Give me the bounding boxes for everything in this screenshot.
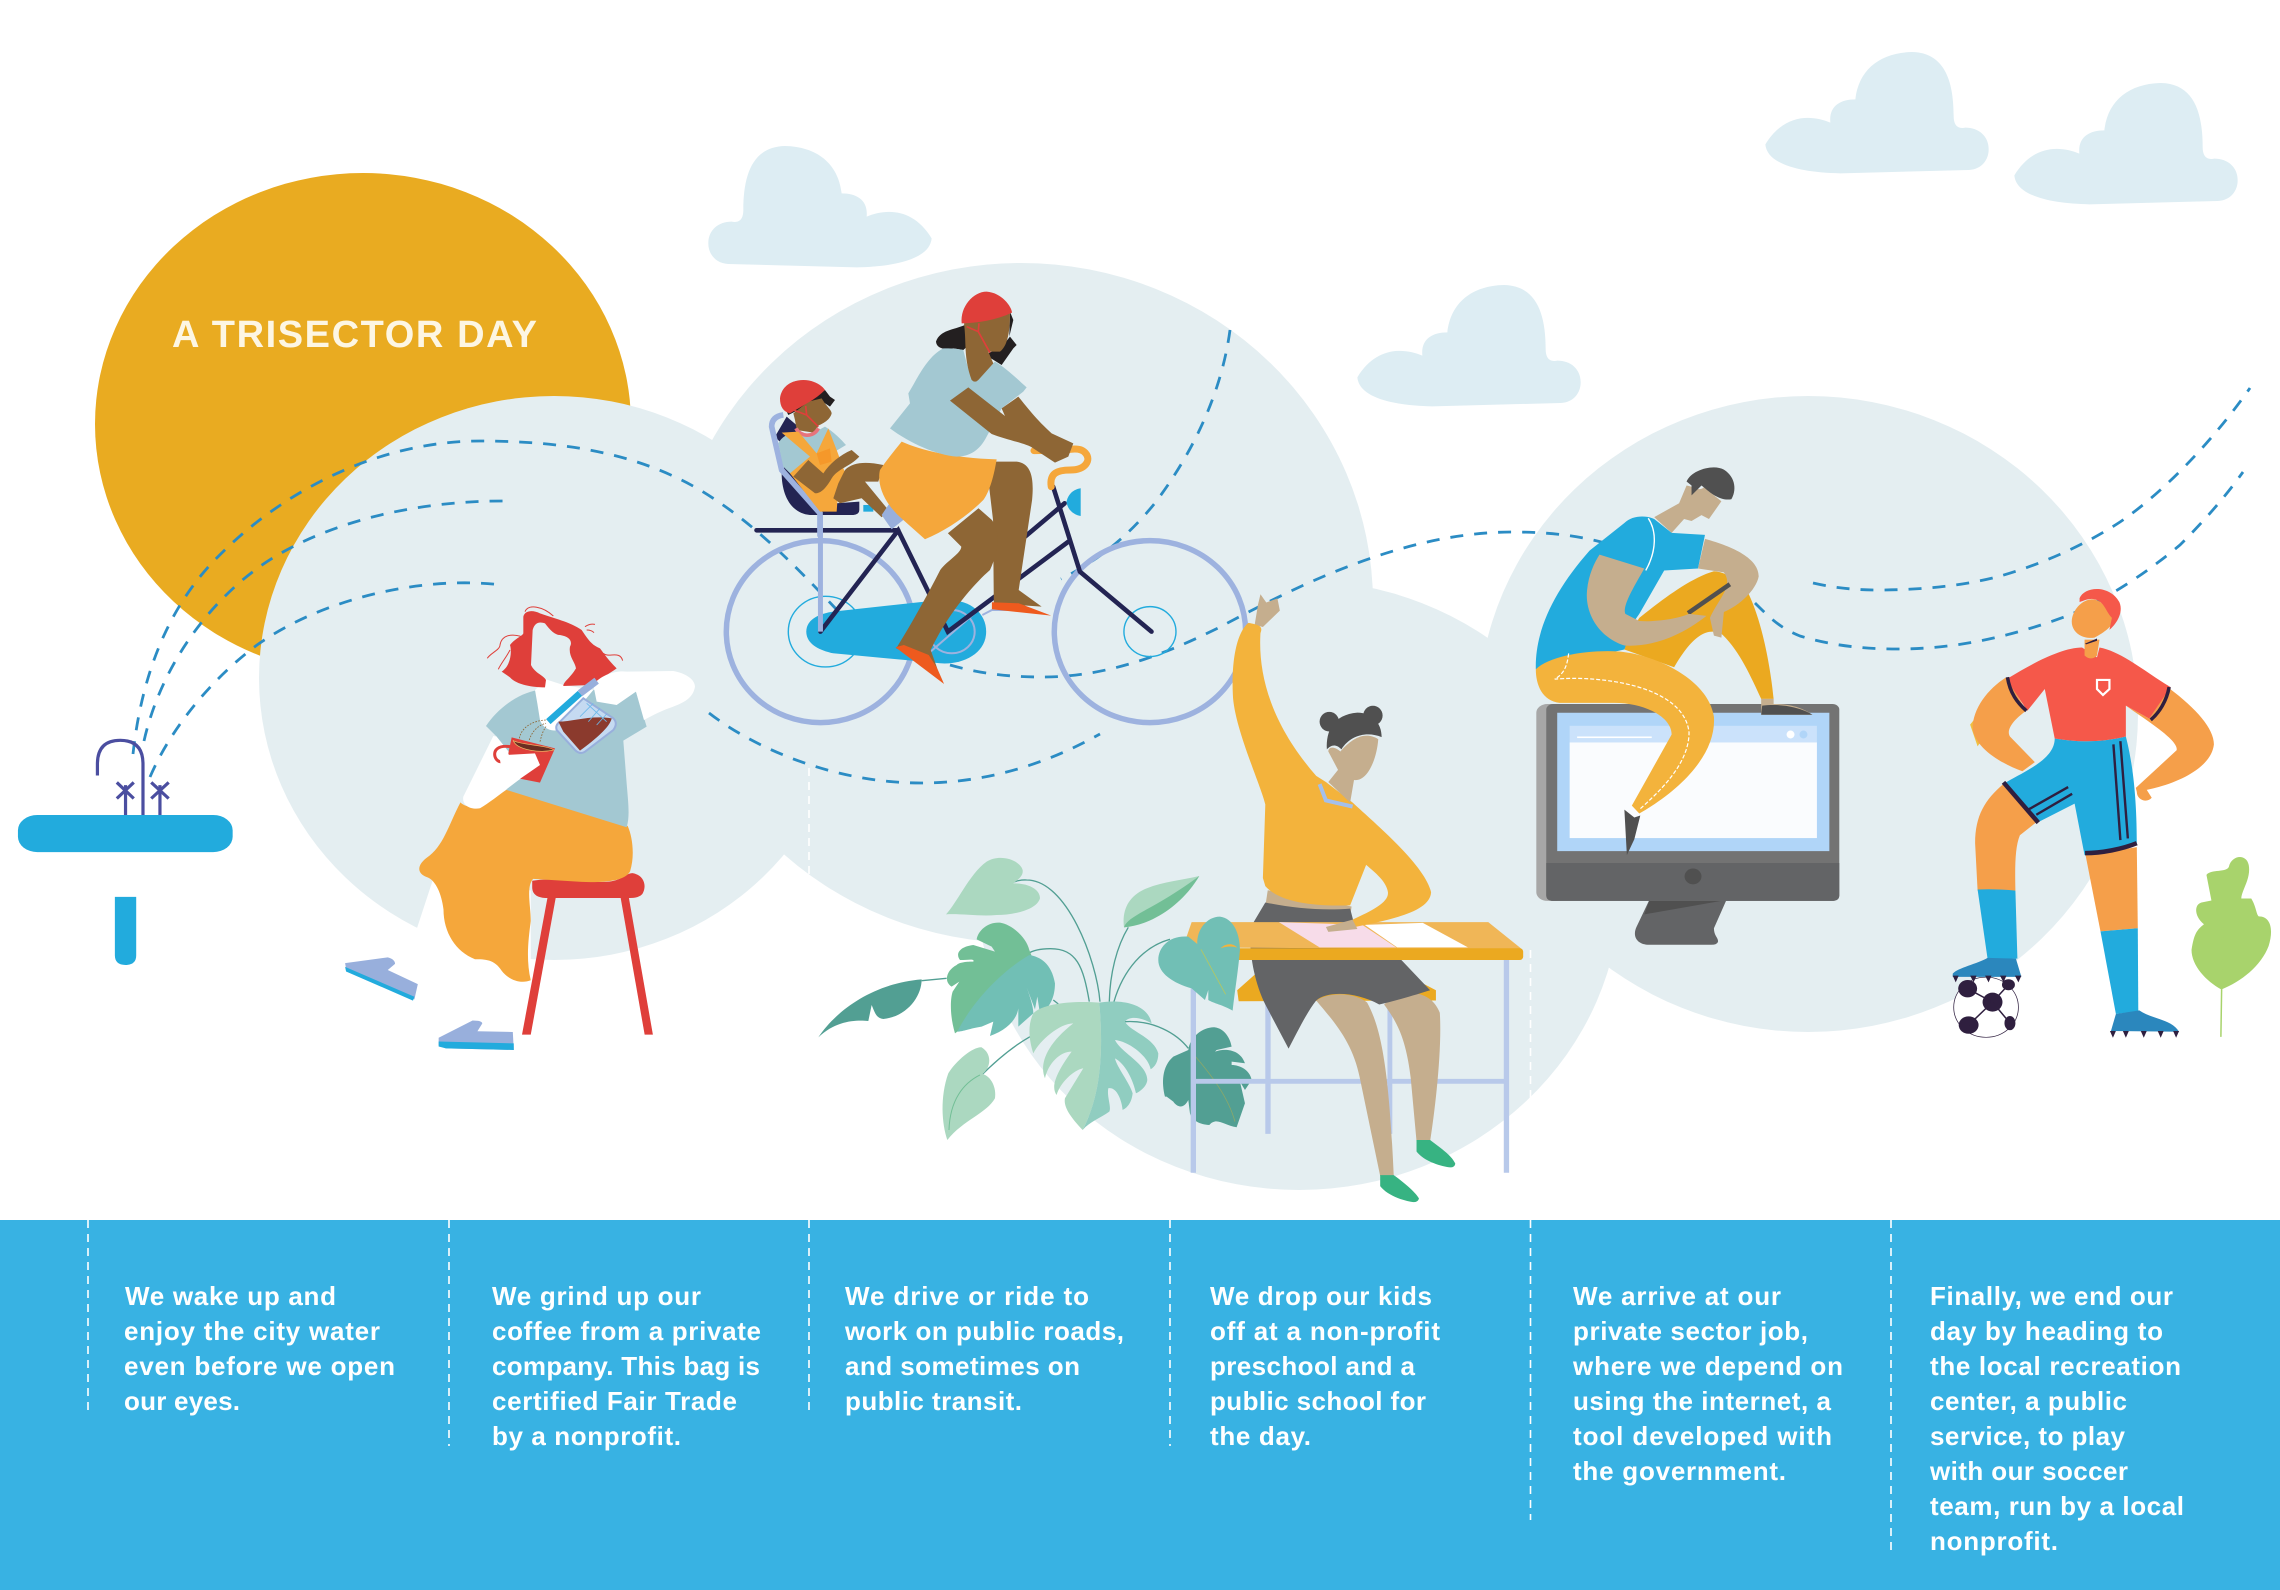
computer man xyxy=(1536,467,1839,945)
column dividers xyxy=(88,1220,1891,1550)
neck xyxy=(535,679,593,731)
dashed route lines xyxy=(133,330,2250,783)
caption: school: preschool and a xyxy=(1210,1351,1416,1381)
green leaf xyxy=(2192,857,2271,1037)
legs and socks xyxy=(1975,784,2138,1014)
head xyxy=(2072,589,2121,658)
stool xyxy=(522,873,653,1035)
sun xyxy=(95,173,631,675)
caption: transit: and sometimes on xyxy=(845,1351,1080,1381)
white arm holding mug xyxy=(463,736,540,809)
child seat xyxy=(772,415,873,537)
cyclists xyxy=(726,292,1246,723)
caption: recreation: the local recreation xyxy=(1930,1351,2181,1381)
plant stems xyxy=(922,880,1188,1077)
drain pipe xyxy=(115,897,136,965)
hubs xyxy=(788,596,1176,667)
caption: internet: private sector job, xyxy=(1573,1316,1808,1346)
caption: coffee: company. This bag is xyxy=(492,1351,760,1381)
shoes xyxy=(345,957,514,1050)
right arm xyxy=(2126,688,2214,801)
caption: internet: We arrive at our xyxy=(1573,1281,1781,1311)
boots xyxy=(1953,958,2179,1038)
caption: recreation: nonprofit. xyxy=(1930,1526,2058,1556)
caption: internet: the government. xyxy=(1573,1456,1786,1486)
white legs xyxy=(417,877,531,1032)
seat post xyxy=(818,513,823,632)
headlamp xyxy=(1067,488,1081,516)
caption: school: public school for xyxy=(1210,1386,1426,1416)
plant xyxy=(818,858,1252,1140)
caption: water: even before we open xyxy=(124,1351,395,1381)
caption: internet: where we depend on xyxy=(1572,1351,1843,1381)
coffee woman upper body xyxy=(463,607,695,827)
desk top xyxy=(1183,922,1523,960)
adult legs xyxy=(895,462,1051,684)
lower left leaf xyxy=(943,1047,995,1140)
teal leaf over desk xyxy=(1158,917,1240,1011)
caption: internet xyxy=(1572,1281,1843,1486)
mug xyxy=(495,737,555,783)
caption: transit: public transit. xyxy=(845,1386,1022,1416)
riders upper bodies xyxy=(772,292,1073,539)
rear wheel xyxy=(726,541,915,723)
caption: recreation xyxy=(1929,1281,2184,1556)
caption: recreation: service, to play xyxy=(1930,1421,2126,1451)
caption: water xyxy=(124,1281,395,1416)
chain guard xyxy=(806,600,986,663)
left arm xyxy=(1970,677,2035,771)
caption: water: our eyes. xyxy=(124,1386,240,1416)
hair xyxy=(502,611,617,687)
soccer player xyxy=(1953,589,2271,1038)
adult xyxy=(879,292,1073,539)
caption: recreation: center, a public xyxy=(1930,1386,2127,1416)
cloud 4 xyxy=(1357,285,1581,406)
caption: school: off at a non-profit xyxy=(1210,1316,1440,1346)
big monstera leaf xyxy=(1029,1001,1158,1130)
leaf top left xyxy=(946,858,1040,915)
bike frame xyxy=(757,487,1151,632)
sink basin xyxy=(18,815,233,852)
caption: coffee: We grind up our xyxy=(492,1281,701,1311)
blue caption band xyxy=(0,1220,2280,1590)
caption: recreation: with our soccer xyxy=(1929,1456,2128,1486)
sink with faucet xyxy=(18,740,233,965)
caption: transit: We drive or ride to xyxy=(845,1281,1089,1311)
caption: transit: work on public roads, xyxy=(844,1316,1124,1346)
coffee carafe xyxy=(548,681,616,753)
shirt xyxy=(486,690,647,827)
crank xyxy=(929,610,1019,653)
soccer ball xyxy=(1954,977,2018,1037)
shirt xyxy=(2006,648,2171,741)
cloud 3 xyxy=(2014,83,2238,204)
caption: school: the day. xyxy=(1210,1421,1311,1451)
chair seat and desk legs xyxy=(1191,960,1509,1173)
clouds xyxy=(708,52,2238,406)
caption: recreation: team, run by a local xyxy=(1930,1491,2184,1521)
desk woman xyxy=(1183,594,1523,1202)
white arm holding carafe xyxy=(593,671,695,720)
caption: school xyxy=(1210,1281,1440,1451)
caption: transit xyxy=(844,1281,1124,1416)
monitor xyxy=(1536,704,1839,945)
white dashed guide lines above band xyxy=(809,768,1530,1220)
faucet xyxy=(97,740,169,815)
caption: internet: using the internet, a xyxy=(1573,1386,1832,1416)
handlebar xyxy=(1034,449,1088,487)
bicycle xyxy=(726,449,1246,723)
caption: coffee: by a nonprofit. xyxy=(492,1421,681,1451)
dark monstera leaf xyxy=(1163,1027,1252,1127)
hair wisps xyxy=(487,607,623,669)
caption: coffee xyxy=(492,1281,761,1451)
caption: coffee: coffee from a private xyxy=(492,1316,761,1346)
cloud 2 xyxy=(1765,52,1989,173)
caption: recreation: day by heading to xyxy=(1930,1316,2163,1346)
caption: water: enjoy the city water xyxy=(124,1316,380,1346)
woman upper body xyxy=(1233,594,1431,932)
caption: coffee: certified Fair Trade xyxy=(492,1386,737,1416)
background circles xyxy=(259,263,2138,1190)
caption: recreation: Finally, we end our xyxy=(1930,1281,2173,1311)
steam dots xyxy=(519,720,546,742)
caption: water: We wake up and xyxy=(125,1281,336,1311)
title: A TRISECTOR DAY xyxy=(172,314,537,356)
caption: internet: tool developed with xyxy=(1573,1421,1832,1451)
leaf top right xyxy=(1124,876,1199,927)
front wheel xyxy=(1054,541,1246,723)
cloud 1 xyxy=(708,146,932,267)
man xyxy=(1536,467,1812,855)
caption: school: We drop our kids xyxy=(1210,1281,1432,1311)
woman skirt and legs xyxy=(1250,890,1455,1202)
leaf far left xyxy=(818,979,922,1037)
skirt xyxy=(419,790,633,982)
child xyxy=(778,380,920,529)
monstera leaf green and teal xyxy=(947,923,1055,1036)
coffee woman lower body xyxy=(345,790,653,1050)
shorts xyxy=(2003,736,2137,855)
